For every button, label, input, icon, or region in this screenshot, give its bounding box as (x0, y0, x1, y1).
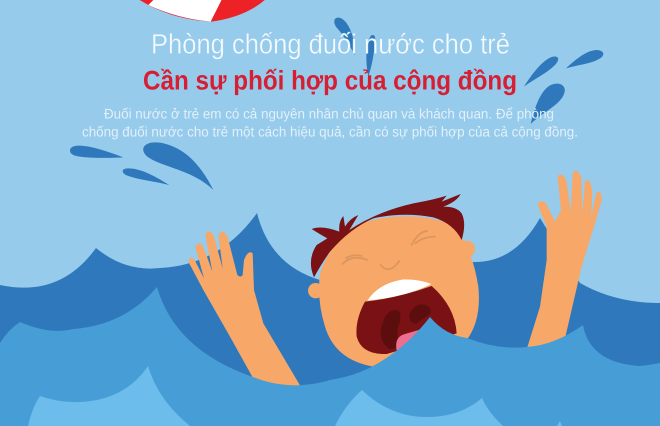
hair (311, 194, 464, 277)
icon: water splashes left (70, 18, 355, 190)
right arm and hand (523, 171, 602, 360)
title: Phòng chống đuối nước cho trẻ (151, 28, 510, 60)
front wave (28, 366, 562, 426)
mouth (356, 286, 457, 354)
icon: life buoy (137, 0, 267, 22)
left ear (308, 283, 323, 298)
back wave (0, 213, 660, 426)
eye right (412, 231, 435, 245)
intro text (82, 106, 578, 140)
intro text: chống đuối nước cho trẻ một cách hiệu quả, cần có sự phối hợp của cả cộng đồng. (82, 124, 578, 140)
subtitle: Cần sự phối hợp của cộng đồng (143, 66, 517, 96)
intro text: Đuối nước ở trẻ em có cả nguyên nhân chủ quan và khách quan. Để phòng (104, 106, 554, 122)
teeth (367, 279, 431, 301)
throat (381, 305, 431, 349)
boy head (308, 194, 479, 367)
nose (381, 261, 399, 269)
icon: water splashes right (366, 35, 603, 124)
eye left (343, 255, 367, 264)
tongue (396, 329, 423, 355)
left arm and hand (188, 231, 307, 397)
middle wave (0, 287, 660, 426)
right ear (458, 241, 475, 257)
face (319, 216, 479, 367)
